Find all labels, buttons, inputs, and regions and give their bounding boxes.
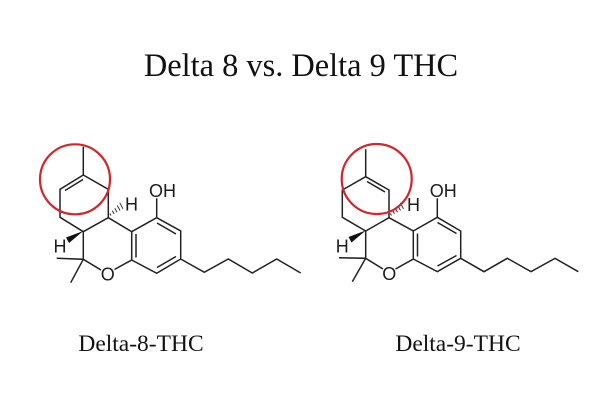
atom labels [54, 181, 176, 284]
molecule: Delta-9-THC [336, 144, 578, 284]
molecule: Delta-8-THC [40, 144, 301, 284]
atom labels: H [336, 236, 349, 256]
atom labels: O [101, 264, 115, 284]
hashed bond [110, 203, 123, 216]
atom labels: OH [430, 181, 457, 201]
wedge bond [66, 231, 83, 243]
title: Delta 8 vs. Delta 9 THC [144, 48, 458, 84]
atom labels: O [382, 264, 396, 284]
red highlight circle [40, 144, 110, 214]
atom labels: OH [149, 181, 176, 201]
red highlight circle [342, 144, 412, 214]
label: Delta-9-THC: Delta-9-THC [395, 331, 521, 357]
label: Delta-8-THC: Delta-8-THC [78, 331, 204, 357]
atom labels: H [54, 236, 66, 256]
hashed bond [390, 203, 404, 216]
wedge bond [348, 230, 366, 242]
atom labels: H [407, 195, 420, 215]
atom labels [336, 181, 457, 284]
atom labels: H [125, 194, 138, 214]
